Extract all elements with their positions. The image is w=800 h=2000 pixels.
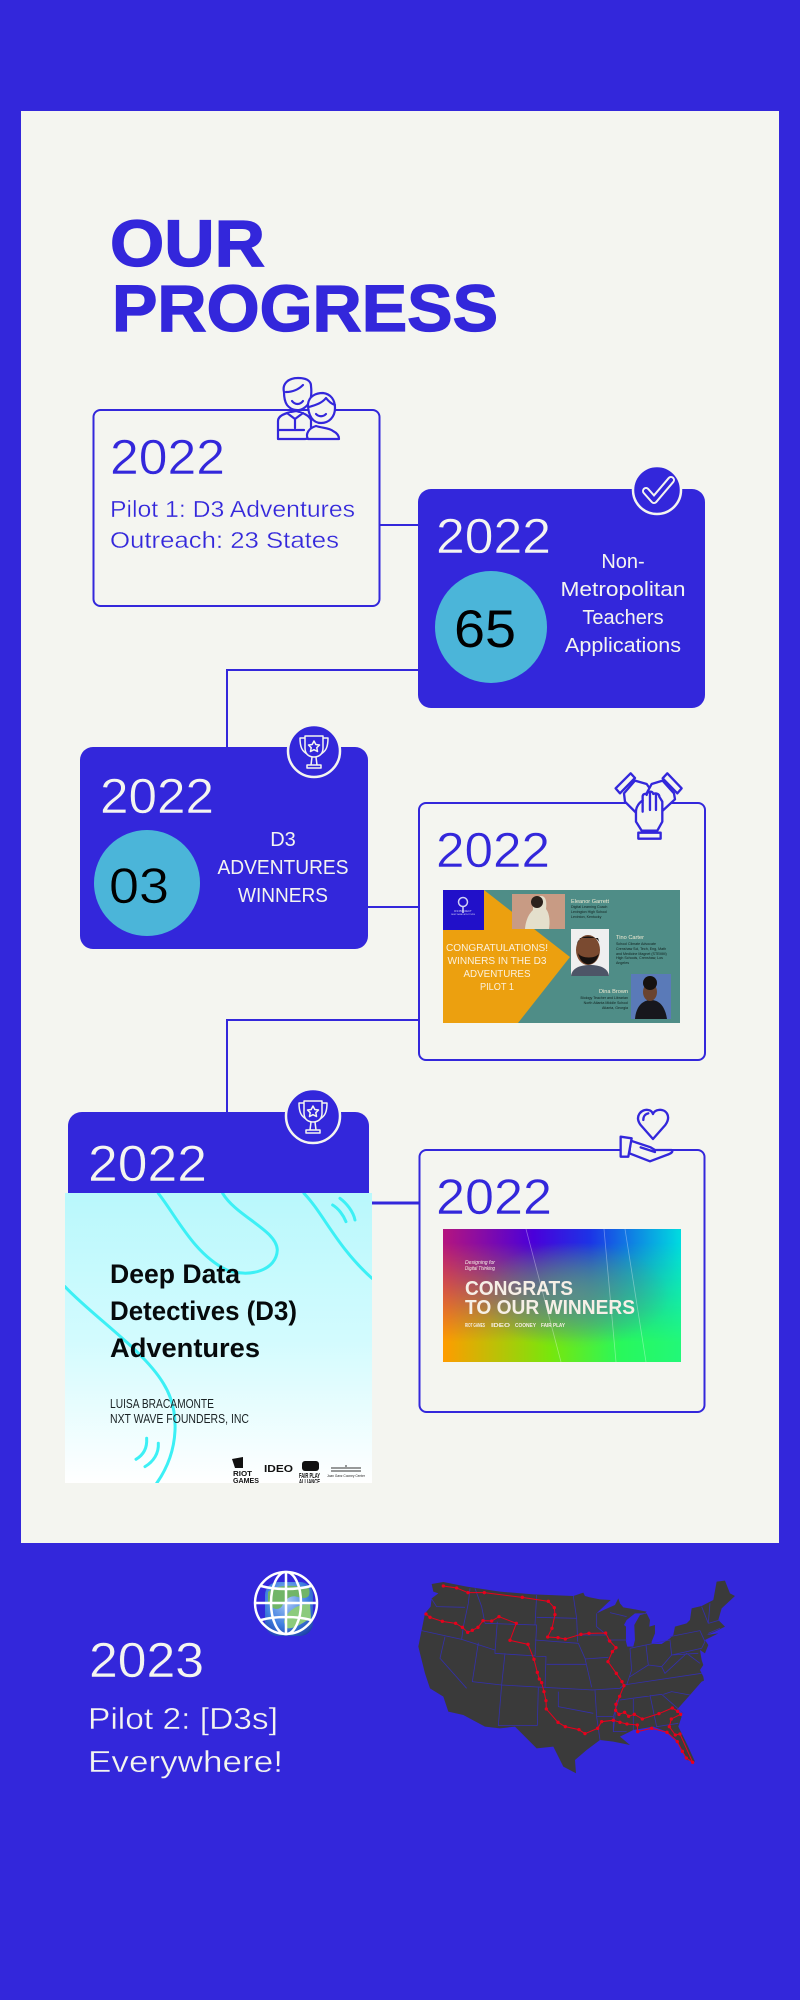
icon: trophy [288,725,340,777]
card 3 label: ADVENTURES [218,857,348,879]
poster: deep data detectives adventures: NXT WAVE FOUNDERS, INC [110,1411,249,1426]
poster: deep data detectives adventures [65,1193,372,1486]
map: united states route [418,1581,735,1773]
card 2 label: Applications [565,635,681,657]
congratulations image: Biology Teacher and Librarian [581,996,628,1000]
card 3 year: 2022 [100,770,214,824]
icon: hand holding heart [621,1110,672,1161]
congratulations image: and Medicine Magnet (STEMM) [616,952,667,956]
card 5 year: 2022 [88,1135,207,1192]
icon: two people [278,378,339,439]
poster: deep data detectives adventures: GAMES [233,1476,259,1485]
congrats to our winners image: Designing for [465,1260,495,1266]
map state lines [422,1588,720,1740]
panel: card 1 pilot outreach [94,378,380,606]
congratulations image: DEEP DATA DETECTIVES [451,913,476,916]
icon: star trophy [286,1089,340,1143]
congratulations image: Angeles [616,961,629,965]
poster: deep data detectives adventures: Detectives (D3) [110,1296,297,1326]
card 1 text: Pilot 1: D3 Adventures [110,496,355,522]
stat circle 03 [94,830,200,936]
card 1 year: 2022 [110,431,225,485]
card 2 label [560,551,686,657]
congratulations image: Lexinton, Kentucky [571,915,602,919]
infographic canvas [21,111,779,1778]
card 4 year: 2022 [436,824,550,878]
stat circle 03: 03 [109,858,169,914]
icon: globe [255,1572,317,1636]
section: 2023 pilot 2 text: 2023 [89,1634,204,1688]
congratulations image: Atlanta, Georgia [602,1006,628,1010]
card 2 label: Teachers [582,607,664,629]
congratulations image: North Atlanta Middle School [584,1001,628,1005]
congrats to our winners image [443,1229,681,1362]
icon: check mark [633,466,681,514]
icon: joined hands [616,773,682,839]
congratulations image: CONGRATULATIONS! [446,943,548,954]
card 1 text [110,496,355,553]
congratulations image [443,890,680,1023]
poster: deep data detectives adventures: LUISA BRACAMONTE [110,1396,214,1411]
stat circle 65 [435,571,547,683]
congratulations image: Dina Brown [599,989,628,995]
congratulations image: Crenshaw Sci, Tech, Eng, Math [616,947,666,951]
congratulations image: WINNERS IN THE D3 [448,956,547,967]
congratulations image: ADVENTURES [464,969,531,980]
congratulations image: Eleanor Garrett [571,899,610,905]
poster: deep data detectives adventures: ALLIANCE [299,1477,320,1486]
card 3 label [218,829,348,907]
congrats to our winners image: TO OUR WINNERS [465,1297,635,1319]
congratulations image: Lexington High School [571,910,607,914]
card 2 label: Non- [601,551,645,573]
poster: deep data detectives adventures: Deep Data [110,1259,241,1289]
congrats to our winners image: IDEO [491,1323,510,1329]
title: PROGRESS [112,271,498,345]
panel: card 4 winners image [419,773,705,1060]
congrats to our winners image: RIOT GAMES [465,1323,485,1329]
card 3 label: D3 [270,829,296,851]
panel: card 5 poster card [65,1089,372,1486]
card 3 label: WINNERS [238,885,328,907]
poster: deep data detectives adventures: FAIR PLAY [299,1471,320,1480]
congratulations image: Digital Learning Coach [571,905,607,909]
poster: deep data detectives adventures: IDEO [264,1464,293,1475]
card 2 year: 2022 [436,510,551,564]
card 1 text: Outreach: 23 States [110,527,339,553]
poster: deep data detectives adventures: RIOT [233,1469,252,1478]
poster: deep data detectives adventures: Joan Ganz Cooney Center [327,1473,366,1478]
section: 2023 pilot 2 text [88,1634,283,1779]
connector lines [227,525,419,1203]
main panel [21,111,779,1543]
map land [418,1581,735,1773]
panel: card 3 adventures winners [80,725,368,949]
section: 2023 pilot 2 text: Everywhere! [88,1744,283,1779]
title: OUR [110,206,265,280]
panel: card 2 teachers applications [418,466,705,708]
congratulations image: D3 PROJECT [454,909,472,913]
congrats to our winners image: Digital Thinking [465,1266,495,1272]
congratulations image: School Climate Advocate [616,942,656,946]
congratulations image: PILOT 1 [480,982,514,993]
map route path [426,1586,693,1762]
congratulations image: High Schools, Crenshaw, Los [616,956,663,960]
congrats to our winners image: COONEY [515,1323,537,1329]
poster: deep data detectives adventures: Adventures [110,1333,260,1363]
congratulations image: Tino Carter [616,935,644,941]
title [110,206,498,345]
congrats to our winners image: CONGRATS [465,1278,573,1300]
congrats to our winners image: FAIR PLAY [541,1323,566,1329]
stat circle 65: 65 [454,600,516,659]
card 2 label: Metropolitan [560,579,686,601]
panel: card 6 congrats image [420,1110,704,1412]
section: 2023 pilot 2 text: Pilot 2: [D3s] [88,1701,278,1736]
card 6 year: 2022 [436,1169,552,1225]
